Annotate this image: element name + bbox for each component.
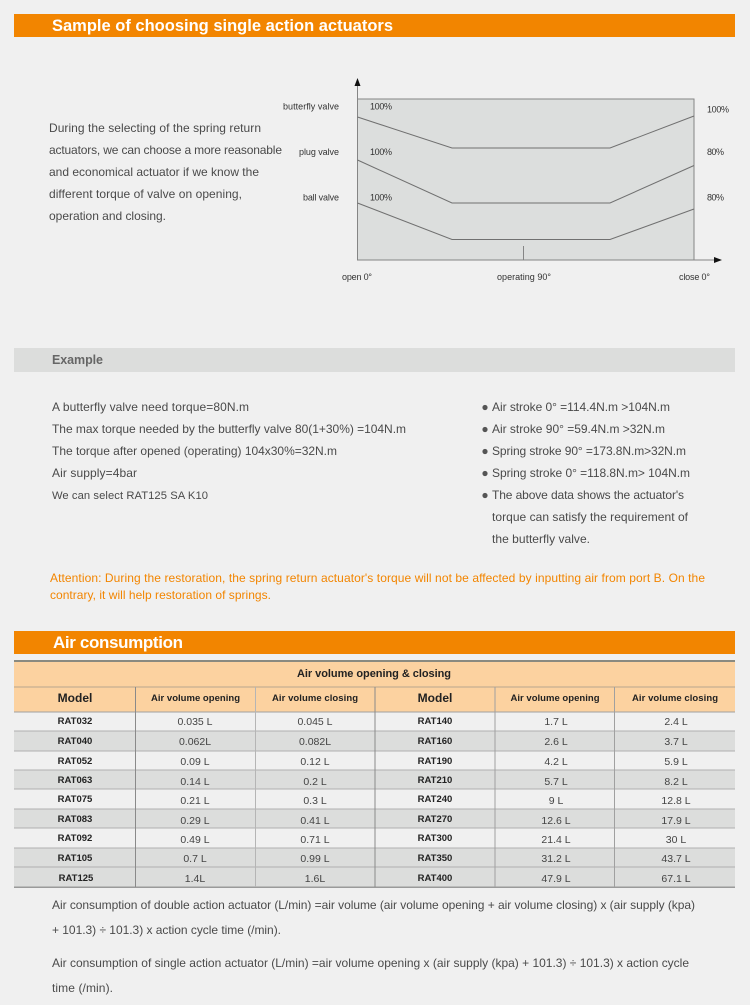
- section banner: Air consumption: Air consumption: [53, 633, 183, 652]
- right table data: RAT140: [418, 716, 452, 727]
- bullet list: actuator torque results: Spring stroke 90° =173.8N.m>32N.m: [492, 444, 686, 458]
- right table data: 12.6 L: [541, 815, 571, 827]
- section banner: Air consumption: [14, 631, 735, 654]
- title banner: Sample of choosing single action actuators: [14, 14, 735, 37]
- text block: example calculation: Air supply=4bar: [52, 466, 137, 480]
- left table data: [58, 716, 333, 885]
- right table data: RAT400: [418, 873, 452, 884]
- table title: Air volume opening & closing: [297, 668, 451, 680]
- section bar: Example: Example: [52, 353, 103, 367]
- column headers: Model: [418, 691, 452, 705]
- right table data: 5.7 L: [544, 776, 568, 788]
- column headers: Air volume closing: [632, 693, 718, 704]
- left table data: RAT040: [58, 736, 92, 747]
- right table data: RAT350: [418, 853, 452, 864]
- right table data: RAT240: [418, 794, 452, 805]
- left table data: 0.21 L: [180, 795, 210, 807]
- left table data: 1.4L: [185, 873, 205, 885]
- right table data: 21.4 L: [541, 834, 571, 846]
- right table data: 8.2 L: [664, 776, 688, 788]
- bullet list: actuator torque results: Spring stroke 0° =118.8N.m> 104N.m: [492, 466, 690, 480]
- right table data: RAT300: [418, 833, 452, 844]
- left table data: RAT075: [58, 794, 93, 805]
- left table data: 0.71 L: [300, 834, 330, 846]
- text block: example calculation: The max torque needed by the butterfly valve 80(1+30%) =104N.m: [52, 422, 406, 436]
- left table data: RAT105: [58, 853, 93, 864]
- left table data: 0.7 L: [183, 853, 207, 865]
- text block: selection intro: During the selecting of the spring return: [49, 121, 261, 135]
- text block: example calculation: We can select RAT125 SA K10: [52, 490, 208, 502]
- left table data: 0.12 L: [300, 756, 330, 768]
- attention note: [50, 571, 705, 602]
- bullet list: actuator torque results: torque can satisfy the requirement of: [492, 510, 689, 524]
- right table data: [418, 716, 691, 885]
- right table data: 47.9 L: [541, 873, 571, 885]
- chart: valve torque curves: butterfly valve: [283, 102, 339, 112]
- left table data: RAT052: [58, 756, 92, 767]
- left table data: RAT032: [58, 716, 92, 727]
- left table data: RAT083: [58, 814, 92, 825]
- chart: valve torque curves: ball valve: [303, 192, 339, 202]
- table: air volume opening and closing: [14, 660, 735, 888]
- right table data: 43.7 L: [661, 853, 691, 865]
- chart: valve torque curves: 80%: [707, 147, 724, 157]
- attention note: Attention: During the restoration, the spring return actuator's torque will not be affected by inputting air from port B. On the: [50, 571, 705, 585]
- left table data: RAT125: [59, 873, 94, 884]
- left table data: 0.29 L: [180, 815, 210, 827]
- right table data: 67.1 L: [661, 873, 691, 885]
- chart: valve torque curves: plug valve: [299, 147, 339, 157]
- chart: valve torque curves: 100%: [370, 192, 392, 202]
- chart: valve torque curves: open 0°: [342, 272, 372, 282]
- attention note: contrary, it will help restoration of springs.: [50, 588, 271, 602]
- text block: selection intro: different torque of valve on opening,: [49, 187, 242, 201]
- text block: single action formula: Air consumption of single action actuator (L/min) =air volume opening x (air supply (kpa) + 101.3) ÷ 101.3) x action cycle: [52, 956, 689, 970]
- bullet list: actuator torque results: The above data shows the actuator's: [492, 488, 684, 502]
- left table data: 0.49 L: [180, 834, 210, 846]
- right table data: 2.6 L: [544, 736, 568, 748]
- right table data: RAT190: [418, 756, 452, 767]
- text block: selection intro: [49, 121, 282, 223]
- right table data: 31.2 L: [541, 853, 571, 865]
- chart: valve torque curves: [283, 78, 729, 282]
- text block: double action formula: [52, 898, 695, 937]
- left table data: 0.045 L: [297, 716, 333, 728]
- right table data: 30 L: [666, 834, 686, 846]
- text block: selection intro: actuators, we can choose a more reasonable: [49, 143, 282, 157]
- column headers: Air volume opening: [510, 693, 600, 704]
- left table data: 0.09 L: [180, 756, 210, 768]
- left table data: 0.062L: [179, 736, 211, 748]
- right table data: 3.7 L: [664, 736, 688, 748]
- text block: example calculation: The torque after opened (operating) 104x30%=32N.m: [52, 444, 337, 458]
- left table data: 0.035 L: [177, 716, 213, 728]
- bullet list: actuator torque results: Air stroke 90° =59.4N.m >32N.m: [492, 422, 665, 436]
- text block: example calculation: [52, 400, 406, 502]
- left table data: 0.14 L: [180, 776, 210, 788]
- right table data: 4.2 L: [544, 756, 568, 768]
- column headers: Model: [58, 691, 92, 705]
- text block: example calculation: A butterfly valve need torque=80N.m: [52, 400, 249, 414]
- chart: valve torque curves: 80%: [707, 192, 724, 202]
- right table data: 5.9 L: [664, 756, 688, 768]
- text block: double action formula: + 101.3) ÷ 101.3) x action cycle time (/min).: [52, 923, 281, 937]
- text block: selection intro: and economical actuator if we know the: [49, 165, 259, 179]
- bullet list: actuator torque results: the butterfly valve.: [492, 532, 590, 546]
- right table data: 17.9 L: [661, 815, 691, 827]
- right table data: RAT160: [418, 736, 452, 747]
- column headers: Air volume closing: [272, 693, 358, 704]
- bullet list: actuator torque results: [482, 400, 690, 546]
- chart: valve torque curves: 100%: [370, 102, 392, 112]
- right table data: 9 L: [549, 795, 563, 807]
- left table data: 0.99 L: [300, 853, 330, 865]
- text block: selection intro: operation and closing.: [49, 209, 166, 223]
- text block: single action formula: time (/min).: [52, 981, 113, 995]
- bullet list: actuator torque results: Air stroke 0° =114.4N.m >104N.m: [492, 400, 670, 414]
- left table data: RAT063: [58, 775, 92, 786]
- right table data: RAT270: [418, 814, 452, 825]
- right table data: 1.7 L: [544, 716, 568, 728]
- right table data: 2.4 L: [664, 716, 688, 728]
- column headers: [58, 691, 718, 705]
- chart: valve torque curves: 100%: [370, 147, 392, 157]
- column headers: Air volume opening: [151, 693, 240, 704]
- title banner: Sample of choosing single action actuators: Sample of choosing single action actuators: [52, 17, 393, 35]
- right table data: RAT210: [418, 775, 452, 786]
- left table data: 0.082L: [299, 736, 331, 748]
- left table data: 0.3 L: [303, 795, 327, 807]
- chart: valve torque curves: operating 90°: [497, 272, 551, 282]
- section bar: Example: [14, 348, 735, 372]
- chart: valve torque curves: close 0°: [679, 272, 710, 282]
- chart: valve torque curves: 100%: [707, 104, 729, 114]
- left table data: 0.2 L: [303, 776, 327, 788]
- text block: single action formula: [52, 956, 689, 995]
- right table data: 12.8 L: [661, 795, 691, 807]
- left table data: 1.6L: [305, 873, 325, 885]
- text block: double action formula: Air consumption of double action actuator (L/min) =air volume (air volume opening + air volume closing) x (air supply (kpa): [52, 898, 695, 912]
- left table data: 0.41 L: [300, 815, 330, 827]
- left table data: RAT092: [58, 833, 92, 844]
